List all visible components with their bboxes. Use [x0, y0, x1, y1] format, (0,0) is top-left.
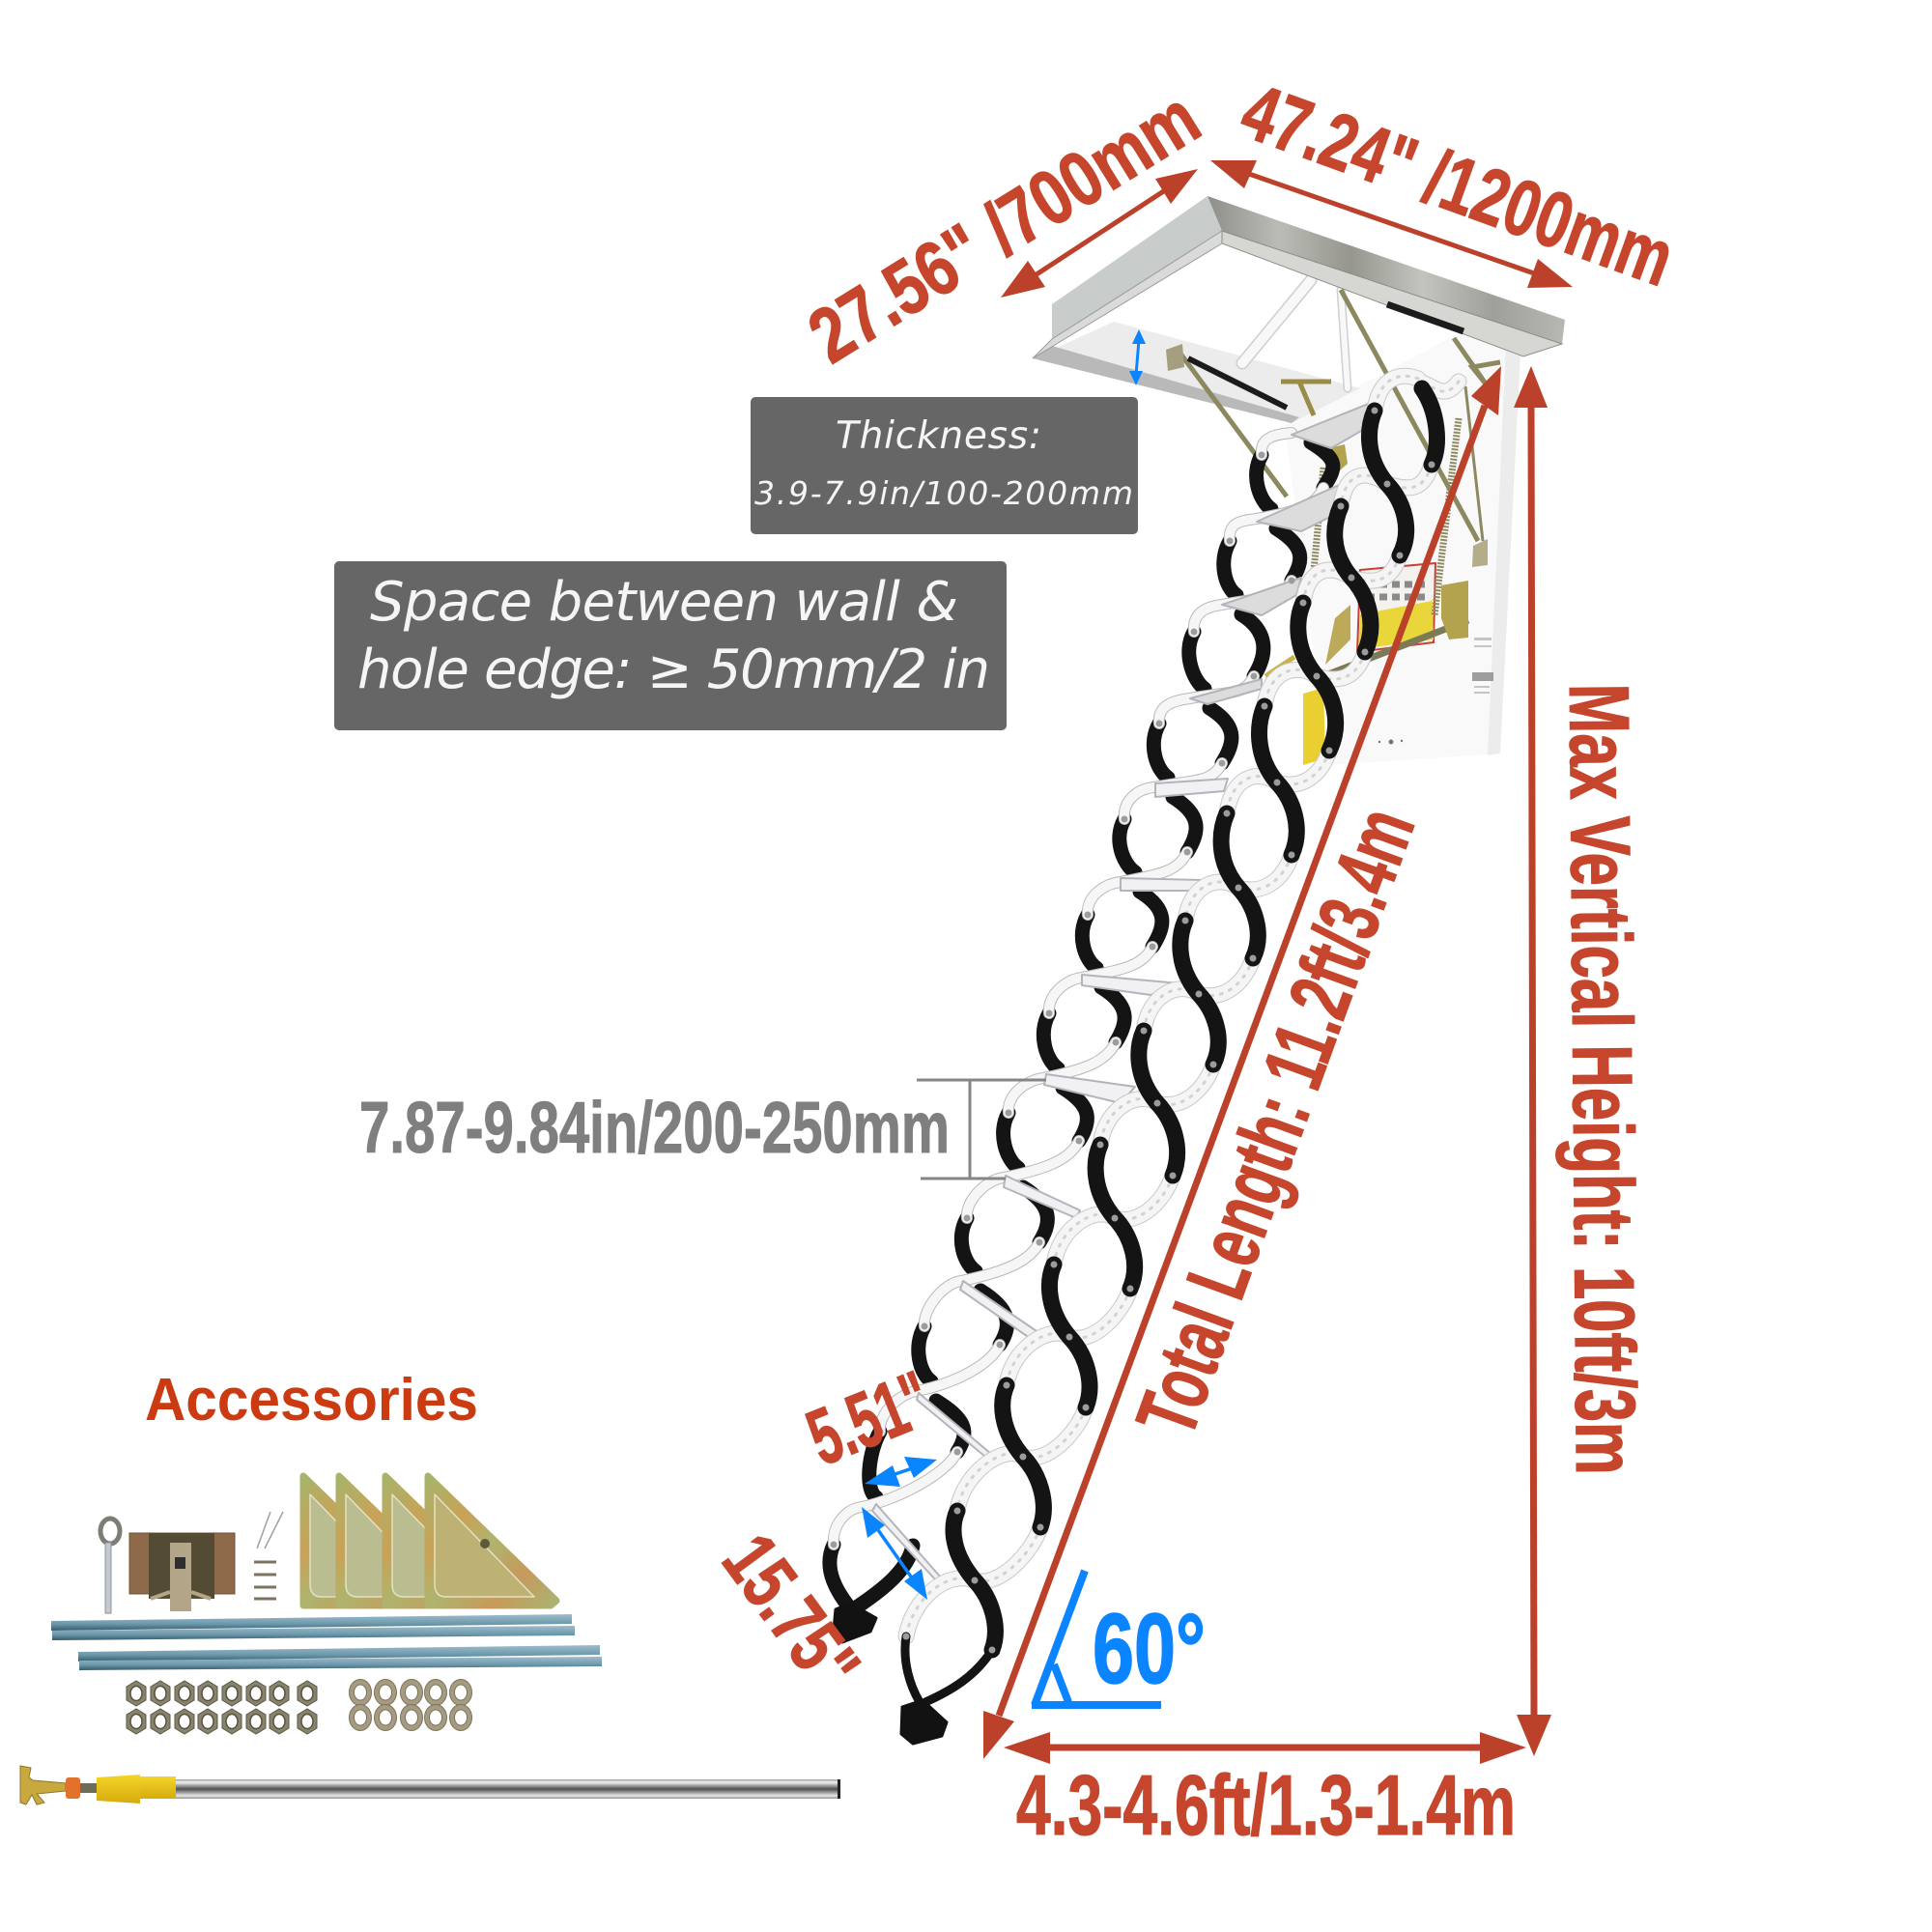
- callout: thickness: [751, 397, 1138, 534]
- ladder rungs: [872, 399, 1380, 1579]
- accessories group: [20, 1476, 840, 1804]
- right chain black S links: [953, 388, 1436, 1650]
- icon: lock plate: [129, 1533, 235, 1611]
- ladder feet: [834, 1604, 947, 1744]
- icon: pin: [100, 1519, 120, 1613]
- left chain white arcs: [834, 433, 1323, 1545]
- left chain black arcs: [830, 442, 1333, 1608]
- icon: threaded rods: [51, 1614, 602, 1670]
- white arms: [1242, 280, 1348, 388]
- label: step width: 15.75": [706, 1519, 876, 1707]
- attic hatch frame: [1033, 196, 1565, 423]
- left beam: [1052, 196, 1222, 339]
- label: 700mm: 27.56" /700mm: [794, 74, 1214, 379]
- lower black legs: [905, 1636, 992, 1702]
- icon: nuts: [127, 1681, 317, 1734]
- icon: 60 degree angle: [1032, 1571, 1206, 1705]
- icon: step width blue arrow: [862, 1507, 927, 1600]
- wall panel: [1285, 328, 1520, 765]
- mechanism struts and springs: [1166, 290, 1500, 679]
- callout: thickness: Thickness:: [836, 414, 1041, 458]
- scissor ladder: [830, 376, 1459, 1744]
- callout: wall clearance: [334, 561, 1007, 730]
- icon: step depth blue arrow: [865, 1457, 937, 1487]
- label: step depth: 5.51": [796, 1354, 943, 1483]
- warning sticker: [1303, 563, 1435, 765]
- arrow: total length: [983, 366, 1501, 1759]
- icon: thickness blue arrow: [1129, 329, 1146, 385]
- arrow: max vertical height: [1514, 366, 1551, 1756]
- callout: thickness: 3.9-7.9in/100-200mm: [754, 474, 1133, 512]
- label: step spacing: 7.87-9.84in/200-250mm: [359, 1087, 950, 1168]
- right chain white arcs: [906, 376, 1459, 1636]
- near board: [1033, 322, 1360, 423]
- arrow: 700mm width: [1001, 169, 1198, 298]
- arrow: 1200mm length: [1210, 160, 1573, 288]
- callout: wall clearance: Space between wall &: [370, 571, 958, 634]
- heading: accessories: Accessories: [145, 1367, 478, 1434]
- label: max vertical height: Max Vertical Height: 10ft/3m: [1551, 683, 1654, 1475]
- step spacing bracket: [359, 1080, 1046, 1179]
- icon: washers: [350, 1679, 471, 1731]
- icon: cotter pins and screws: [254, 1512, 283, 1599]
- label: 60 degrees: 60°: [1093, 1593, 1206, 1704]
- ladder bolts: [834, 411, 1432, 1650]
- arrow: horizontal base: [1004, 1732, 1526, 1764]
- icon: triangular brackets: [303, 1476, 556, 1605]
- label: base width: 4.3-4.6ft/1.3-1.4m: [1016, 1757, 1516, 1853]
- label: total length: Total Length: 11.2ft/3.4m: [1118, 796, 1433, 1447]
- callout: wall clearance: hole edge: ≥ 50mm/2 in: [357, 639, 990, 701]
- barcode: [1378, 638, 1493, 744]
- top beam: [1208, 196, 1565, 344]
- icon: operating pole: [20, 1766, 840, 1804]
- label: 1200mm: 47.24" /1200mm: [1231, 67, 1685, 303]
